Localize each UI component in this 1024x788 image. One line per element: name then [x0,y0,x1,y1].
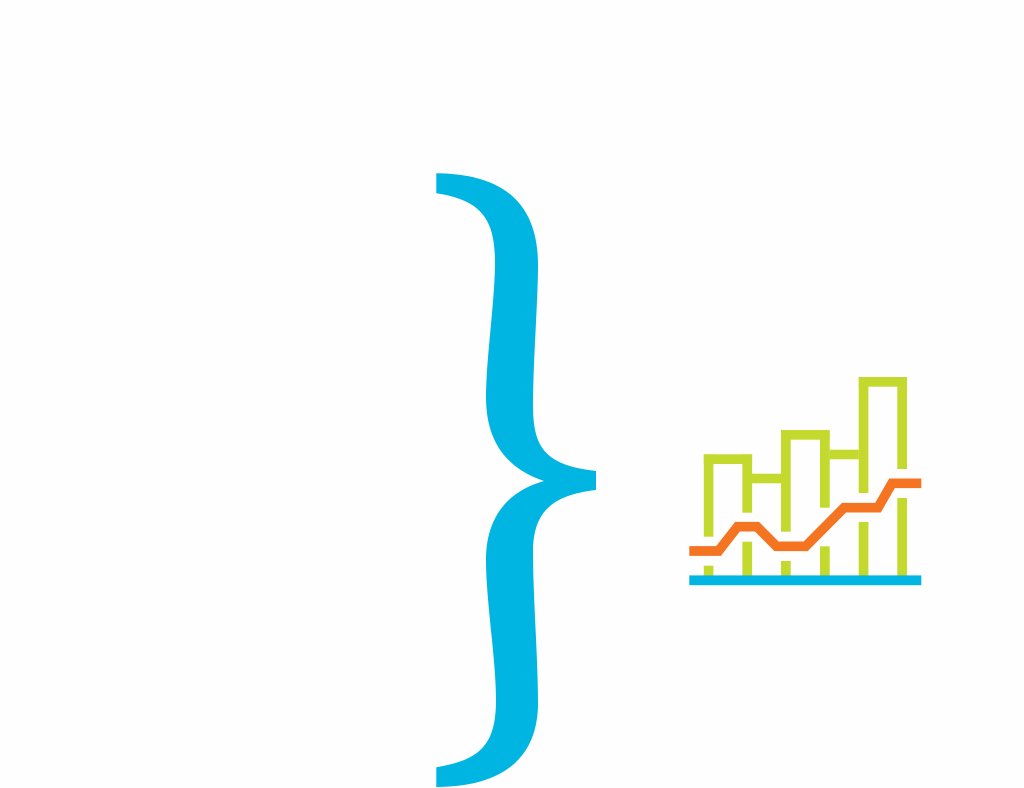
chart: blue baseline [689,575,921,585]
chart: green bars outline [704,377,907,576]
icon: large blue curly brace [436,173,596,787]
icon: bar and line chart [689,377,921,585]
chart: orange trend line [689,483,921,551]
